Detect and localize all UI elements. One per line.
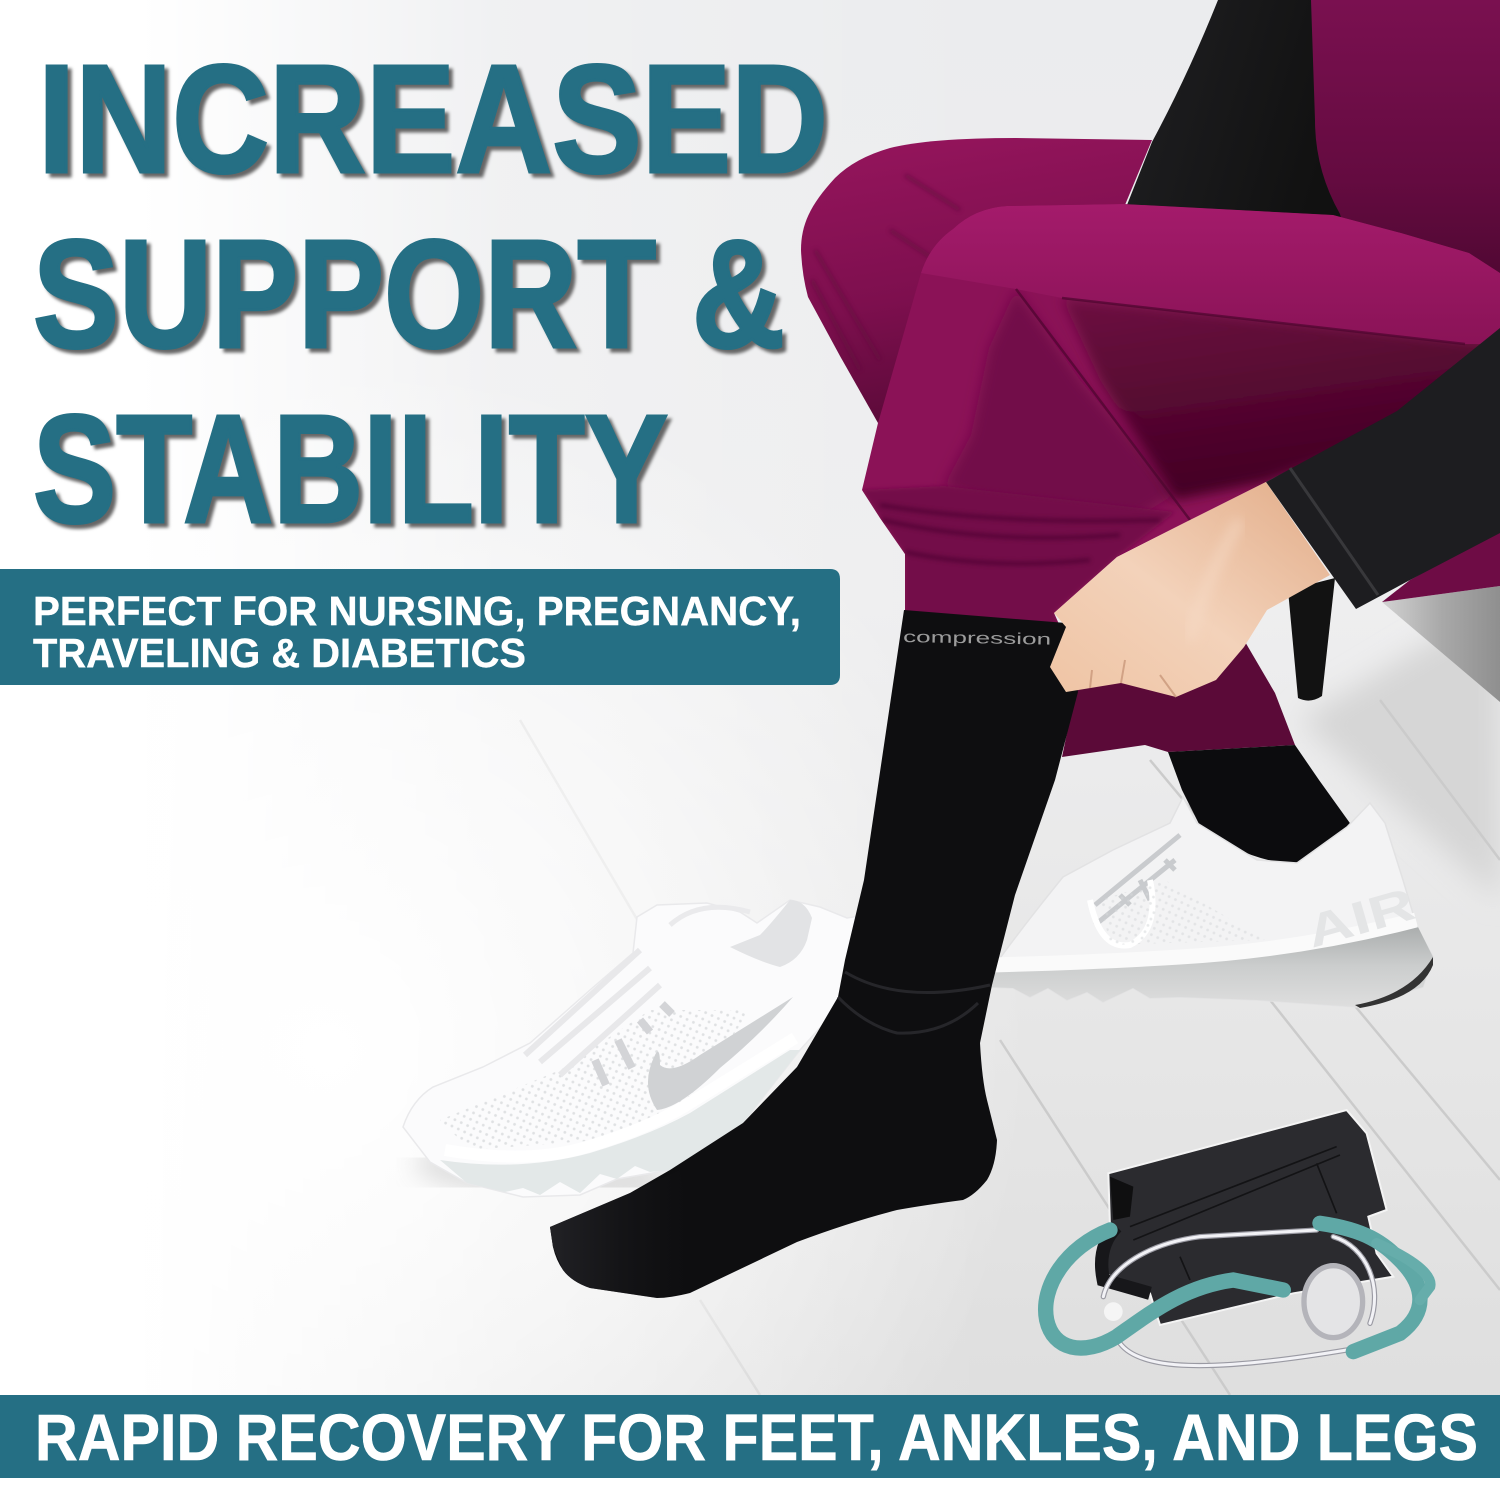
blood pressure cuff xyxy=(1097,1110,1393,1325)
right white sneaker: AIR xyxy=(1300,877,1420,958)
back leg xyxy=(801,138,1152,423)
arm in dark sleeve xyxy=(1266,328,1500,609)
callout banner: perfect for xyxy=(0,569,840,685)
sofa xyxy=(1288,578,1500,702)
callout banner: perfect for: PERFECT FOR NURSING, PREGNANCY, xyxy=(33,588,801,634)
burgundy scrub pants xyxy=(801,138,1500,864)
rear sock xyxy=(1168,745,1352,864)
heading: increased support & stability xyxy=(33,33,828,555)
right white sneaker xyxy=(987,797,1433,1008)
bottom banner: rapid recovery xyxy=(0,1395,1500,1500)
black compression sock on leg xyxy=(550,610,1078,1298)
left white sneaker xyxy=(403,900,866,1197)
black compression sock on leg: compression xyxy=(903,629,1051,649)
left sneaker midsole and air sole xyxy=(440,1050,800,1195)
hand pulling up sock xyxy=(1050,482,1330,697)
left sneaker collar opening xyxy=(730,900,812,967)
heading line 2: SUPPORT & xyxy=(33,208,785,380)
thigh top xyxy=(921,204,1500,344)
blood pressure cuff and stethoscope xyxy=(1046,1110,1430,1366)
heading line 3: STABILITY xyxy=(33,383,668,555)
black undershirt sleeve and burgundy top xyxy=(1123,0,1500,300)
rear pant cuff xyxy=(1062,640,1295,757)
underside shadow xyxy=(1062,298,1500,500)
front leg xyxy=(850,200,1500,650)
left sneaker laces xyxy=(595,1004,672,1085)
stethoscope xyxy=(1046,1223,1430,1366)
middle fold xyxy=(945,293,1170,509)
callout banner: perfect for: TRAVELING & DIABETICS xyxy=(33,630,526,676)
heading line 1: INCREASED xyxy=(38,33,828,205)
left sneaker swoosh xyxy=(648,997,793,1110)
gathered cuff xyxy=(862,486,1172,622)
left sneaker mesh xyxy=(440,1010,750,1150)
